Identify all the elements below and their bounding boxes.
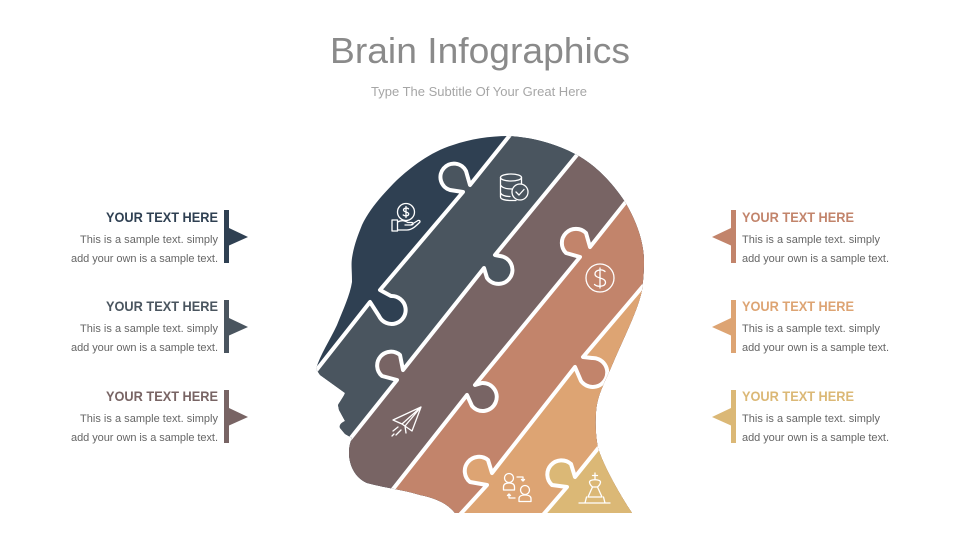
body: This is a sample text. simply bbox=[80, 413, 218, 425]
heading: YOUR TEXT HERE bbox=[742, 209, 854, 225]
heading: YOUR TEXT HERE bbox=[106, 298, 218, 314]
left item 1 bbox=[71, 209, 248, 265]
body: add your own is a sample text. bbox=[742, 342, 889, 354]
piece: slate bbox=[316, 136, 644, 513]
icon: database with check bbox=[500, 174, 528, 200]
heading: YOUR TEXT HERE bbox=[742, 298, 854, 314]
piece: mauve bbox=[349, 154, 644, 513]
piece: brown bbox=[391, 200, 644, 513]
flag bbox=[224, 390, 248, 443]
flag bbox=[712, 390, 736, 443]
infographic bbox=[72, 37, 888, 513]
flag bbox=[712, 300, 736, 353]
heading: YOUR TEXT HERE bbox=[106, 209, 218, 225]
body: This is a sample text. simply bbox=[742, 323, 880, 335]
body: add your own is a sample text. bbox=[71, 432, 218, 444]
head puzzle bbox=[316, 136, 644, 513]
body: add your own is a sample text. bbox=[742, 253, 889, 265]
subtitle: Type The Subtitle Of Your Great Here bbox=[371, 84, 587, 99]
body: add your own is a sample text. bbox=[71, 342, 218, 354]
flag bbox=[224, 210, 248, 263]
icon: paper plane bbox=[392, 407, 421, 436]
right item 2 bbox=[712, 298, 889, 354]
body: This is a sample text. simply bbox=[80, 323, 218, 335]
piece: gold bbox=[542, 446, 632, 513]
flag bbox=[224, 300, 248, 353]
piece: tan bbox=[458, 283, 643, 513]
right item 1 bbox=[712, 209, 889, 265]
left item 2 bbox=[71, 298, 248, 354]
right item 3 bbox=[712, 388, 889, 444]
left item 3 bbox=[71, 388, 248, 444]
heading: YOUR TEXT HERE bbox=[742, 388, 854, 404]
flag bbox=[712, 210, 736, 263]
icon: hand with coin bbox=[392, 204, 420, 231]
icon: dollar coin bbox=[586, 264, 614, 292]
body: add your own is a sample text. bbox=[71, 253, 218, 265]
body: add your own is a sample text. bbox=[742, 432, 889, 444]
title: Brain Infographics bbox=[330, 30, 630, 71]
body: This is a sample text. simply bbox=[742, 234, 880, 246]
piece: navy bbox=[316, 136, 644, 513]
icon: chess king bbox=[579, 473, 610, 503]
body: This is a sample text. simply bbox=[80, 234, 218, 246]
heading: YOUR TEXT HERE bbox=[106, 388, 218, 404]
body: This is a sample text. simply bbox=[742, 413, 880, 425]
icon: people exchange bbox=[504, 474, 531, 502]
